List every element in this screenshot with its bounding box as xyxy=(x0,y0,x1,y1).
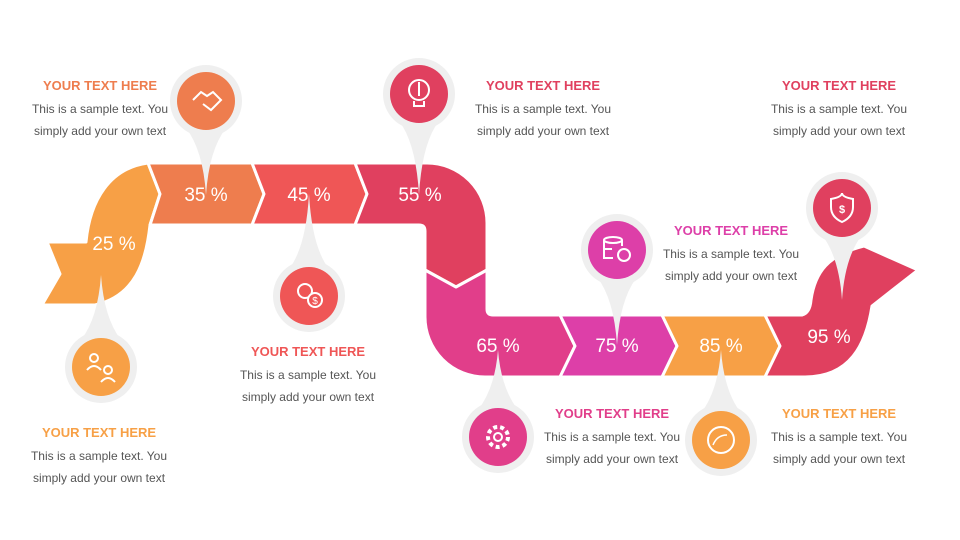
text block 65% xyxy=(544,406,680,466)
text block 85% xyxy=(771,406,907,466)
pin 45% location dollar xyxy=(273,194,345,332)
percent labels: 35 % xyxy=(184,185,228,206)
segment 45% xyxy=(252,163,367,225)
pin 35% handshake xyxy=(170,65,242,195)
text block 65%: This is a sample text. You simply add your own text xyxy=(544,430,680,466)
percent labels: 55 % xyxy=(398,185,442,206)
pin 25% people xyxy=(65,275,137,403)
percent labels: 95 % xyxy=(807,327,851,348)
text block 75%: This is a sample text. You simply add your own text xyxy=(663,247,799,283)
pin 45% location dollar: $ xyxy=(312,296,318,307)
text block 55%: YOUR TEXT HERE xyxy=(486,78,600,93)
text block 85%: This is a sample text. You simply add your own text xyxy=(771,430,907,466)
text block 25%: YOUR TEXT HERE xyxy=(42,425,156,440)
percent labels: 65 % xyxy=(476,336,520,357)
pin 55% brain xyxy=(383,58,455,195)
text block 85%: YOUR TEXT HERE xyxy=(782,406,896,421)
text block 45%: This is a sample text. You simply add your own text xyxy=(240,368,376,404)
text block 75% xyxy=(663,223,799,283)
segment 25% xyxy=(42,163,160,305)
segment 35% xyxy=(148,163,264,225)
segment 85% xyxy=(662,315,780,377)
text block top right: This is a sample text. You simply add your own text xyxy=(771,102,907,138)
text block 45%: YOUR TEXT HERE xyxy=(251,344,365,359)
text block 55% xyxy=(475,78,611,138)
segment 75% xyxy=(560,315,677,377)
segment 95% xyxy=(765,246,918,377)
pin 95% shield xyxy=(806,172,878,300)
pin 75% database xyxy=(581,214,653,345)
percent labels: 45 % xyxy=(287,185,331,206)
text block 25% xyxy=(31,425,167,485)
percent labels: 85 % xyxy=(699,336,743,357)
percent labels xyxy=(92,185,851,357)
text block 75%: YOUR TEXT HERE xyxy=(674,223,788,238)
text block top right: YOUR TEXT HERE xyxy=(782,78,896,93)
text block 65%: YOUR TEXT HERE xyxy=(555,406,669,421)
pin 65% gear xyxy=(462,350,534,473)
segment 55% xyxy=(355,163,487,287)
percent labels: 25 % xyxy=(92,234,136,255)
pin 95% shield: $ xyxy=(839,204,845,216)
segment 65% xyxy=(425,270,575,377)
text block 55%: This is a sample text. You simply add your own text xyxy=(475,102,611,138)
pin 85% strategy xyxy=(685,350,757,476)
text block top right xyxy=(771,78,907,138)
text block 1 xyxy=(32,78,168,138)
percent labels: 75 % xyxy=(595,336,639,357)
text block 1: YOUR TEXT HERE xyxy=(43,78,157,93)
text block 1: This is a sample text. You simply add your own text xyxy=(32,102,168,138)
text block 25%: This is a sample text. You simply add your own text xyxy=(31,449,167,485)
text block 45% xyxy=(240,344,376,404)
